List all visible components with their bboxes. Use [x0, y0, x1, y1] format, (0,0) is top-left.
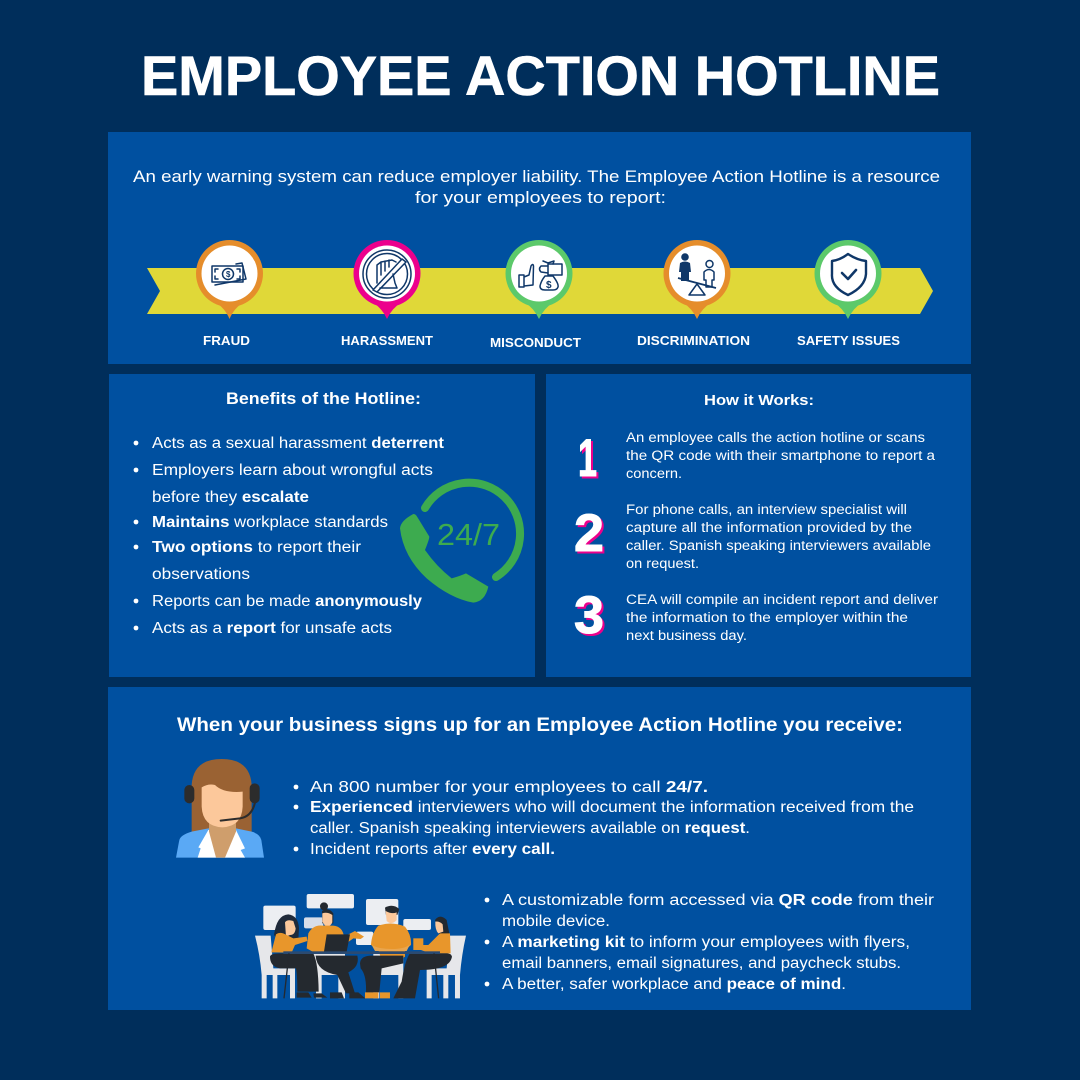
- intro text: [133, 167, 940, 207]
- list: form and marketing: A customizable form accessed via QR code from their: [502, 892, 934, 909]
- person 2: [320, 902, 328, 910]
- benefits list: Acts as a sexual harassment deterrent: [152, 435, 444, 452]
- panel: how it works: [546, 374, 971, 677]
- step 2: [574, 502, 931, 571]
- benefits list: Maintains workplace standards: [152, 514, 388, 531]
- list: form and marketing: A marketing kit to inform your employees with flyers,: [502, 934, 910, 951]
- list: form and marketing: [485, 892, 934, 993]
- pin: harassment: [354, 240, 420, 319]
- how it works heading: How it Works:: [704, 392, 814, 409]
- intro text: An early warning system can reduce employer liability. The Employee Action Hotline is a resource: [133, 167, 940, 186]
- step 3: [574, 586, 939, 645]
- benefits list: [134, 435, 444, 637]
- benefits list: Reports can be made anonymously: [152, 593, 422, 610]
- list: phone service: caller. Spanish speaking interviewers available on request .: [310, 820, 750, 837]
- step 2: caller. Spanish speaking interviewers available: [626, 538, 931, 553]
- step 1: concern.: [626, 466, 682, 481]
- step 3: CEA will compile an incident report and deliver: [626, 592, 939, 607]
- list: phone service: [294, 779, 914, 858]
- label: harassment: HARASSMENT: [341, 334, 433, 348]
- step 3: 3: [574, 586, 604, 645]
- label: misconduct: MISCONDUCT: [490, 336, 581, 350]
- person 4: [435, 917, 449, 935]
- step 3: next business day.: [626, 628, 747, 643]
- list: phone service: Incident reports after every call.: [310, 841, 555, 858]
- list: form and marketing: email banners, email signatures, and paycheck stubs.: [502, 955, 901, 972]
- label: discrimination: DISCRIMINATION: [637, 334, 750, 348]
- step 1: An employee calls the action hotline or scans: [626, 430, 925, 445]
- icon: call centre agent: [176, 759, 264, 858]
- table: [283, 951, 440, 954]
- yellow ribbon arrow: [147, 268, 933, 314]
- benefits heading: Benefits of the Hotline:: [226, 390, 421, 408]
- step 1: [578, 429, 936, 488]
- pin: discrimination: [664, 240, 730, 319]
- step 2: capture all the information provided by the: [626, 520, 912, 535]
- step 3: the information to the employer within the: [626, 610, 908, 625]
- icon: 24/7 phone: 24/7: [437, 517, 500, 552]
- list: form and marketing: A better, safer workplace and peace of mind .: [502, 976, 846, 993]
- step 2: on request.: [626, 556, 699, 571]
- pin: safety issues: [814, 240, 882, 319]
- list: phone service: An 800 number for your employees to call 24/7.: [310, 779, 708, 796]
- receive heading: When your business signs up for an Employee Action Hotline you receive:: [177, 715, 903, 736]
- panel: what you receive: [108, 687, 971, 1010]
- benefits list: Acts as a report for unsafe acts: [152, 620, 392, 637]
- step 2: 2: [574, 504, 604, 563]
- panel: benefits of the hotline: [109, 374, 535, 677]
- benefits list: observations: [152, 566, 250, 583]
- benefits list: Employers learn about wrongful acts: [152, 462, 433, 479]
- step 1: the QR code with their smartphone to report a: [626, 448, 936, 463]
- label: fraud: FRAUD: [203, 334, 250, 348]
- list: form and marketing: mobile device.: [502, 913, 610, 930]
- step 2: For phone calls, an interview specialist will: [626, 502, 907, 517]
- person 1: [274, 914, 299, 943]
- step 1: 1: [578, 429, 597, 488]
- person 3: [385, 906, 399, 915]
- benefits list: Two options to report their: [152, 539, 361, 556]
- pin: misconduct: $: [546, 280, 552, 291]
- list: phone service: Experienced interviewers who will document the information received from the: [310, 799, 914, 816]
- icon: 24/7 phone: [400, 483, 520, 603]
- label: safety issues: SAFETY ISSUES: [797, 334, 900, 348]
- pin: fraud: $: [226, 270, 231, 279]
- benefits list: before they escalate: [152, 489, 309, 506]
- title: EMPLOYEE ACTION HOTLINE: [141, 44, 940, 107]
- pin: fraud: [196, 240, 263, 319]
- pin: misconduct: [506, 240, 572, 319]
- intro text: for your employees to report:: [415, 188, 666, 207]
- illustration: team meeting: [255, 894, 466, 998]
- panel: what employees can report: [108, 132, 971, 364]
